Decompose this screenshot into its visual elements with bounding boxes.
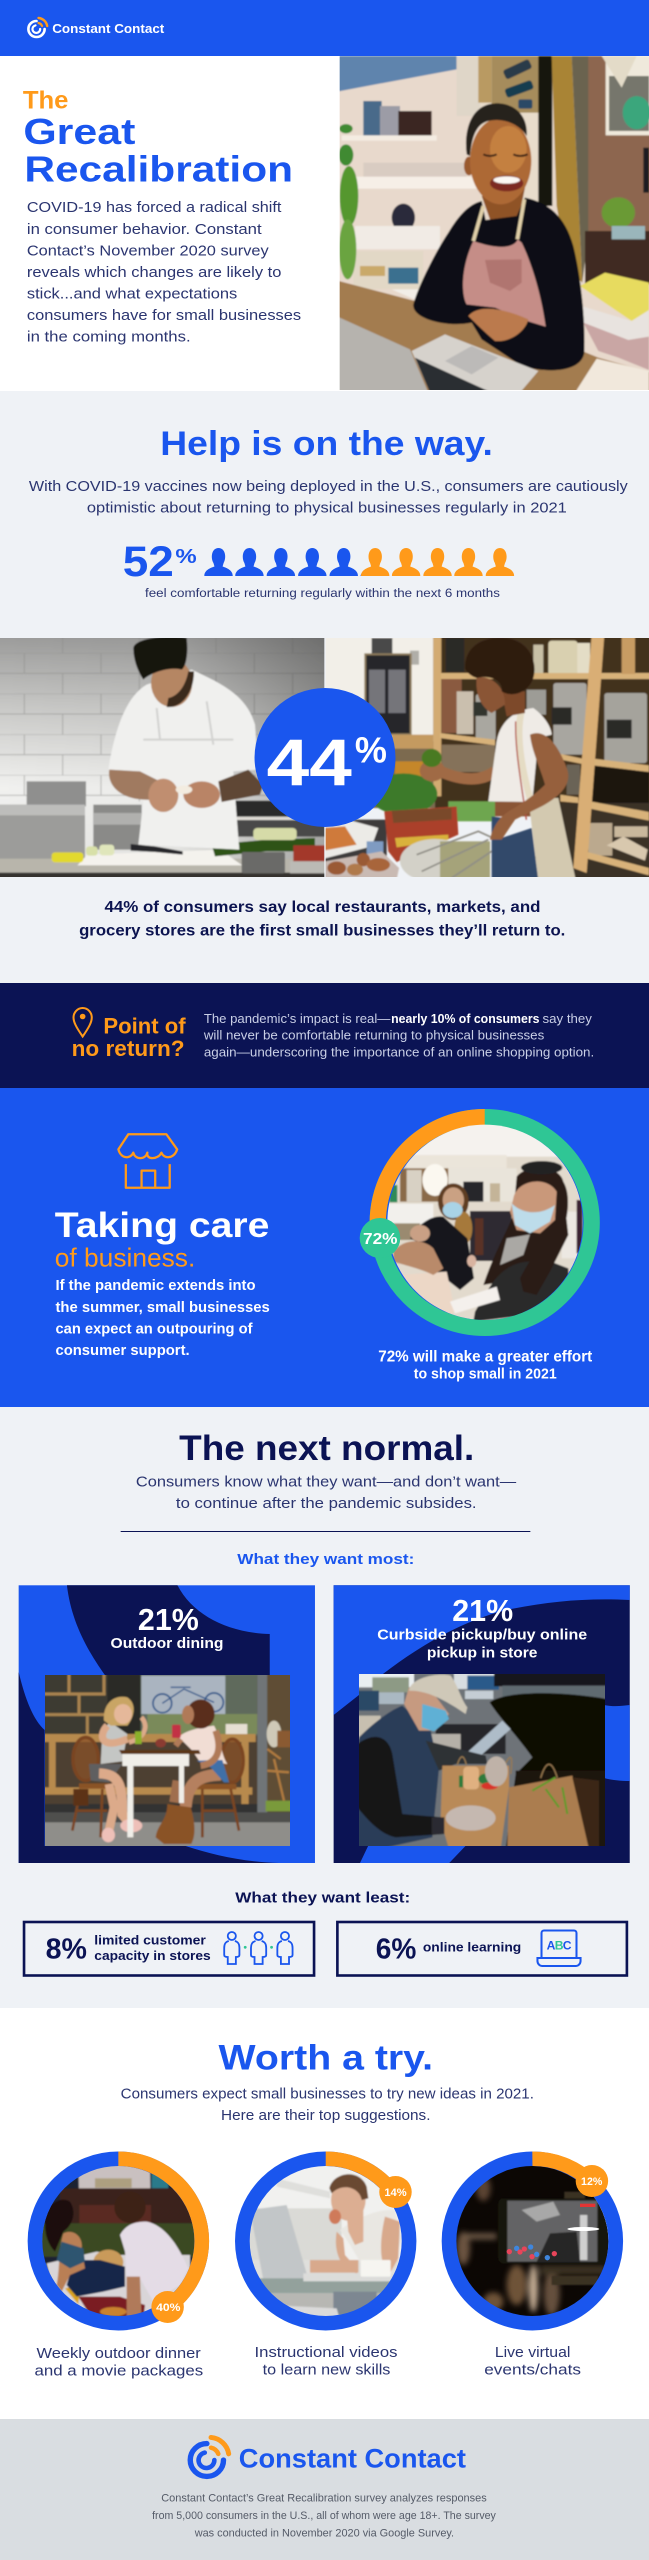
icon row: people [204,548,514,576]
panel: taking care of business [0,1088,649,1407]
panel: point of no return [0,983,649,1088]
chart caption [378,1349,592,1382]
stat: 52%: 52 [123,538,174,586]
intro paragraph: Contact’s November 2020 survey [27,243,269,259]
hero panel [0,56,649,393]
panel: worth a try [28,2044,624,2378]
stat: 52% [123,538,197,586]
badge: 40% [151,2291,184,2323]
stat: 21% [138,1602,199,1637]
intro paragraph: reveals which changes are likely to [27,264,281,281]
photo: couple at outdoor movie [40,2163,198,2320]
label: and a movie packages [34,2363,203,2379]
label: pickup in store [427,1646,537,1661]
icon: laptop with ABC: C [563,1939,572,1952]
badge: 14% [379,2176,412,2208]
photo: delivery worker with bags [357,1672,607,1849]
label [377,1628,587,1661]
icon: laptop with ABC: A [547,1939,556,1952]
icon: location pin [74,1008,92,1036]
box: online learning [337,1922,627,1976]
label: Weekly outdoor dinner [37,2345,201,2362]
label [94,1933,211,1963]
badge: 12% [576,2165,608,2197]
chart caption: 72% will make a greater effort [378,1349,592,1366]
photo: phone filming a live concert [453,2163,612,2320]
label [255,2344,398,2378]
panel: help is on the way [0,391,649,983]
intro paragraph [27,199,301,346]
box: limited capacity [24,1922,314,1976]
title: Great [23,111,135,152]
panel: the next normal [0,1407,649,2008]
subheading text: optimistic about returning to physical businesses regularly in 2021 [87,500,567,517]
badge: 14%: 14% [384,2187,407,2199]
stat: 8% [46,1934,87,1965]
logo: Constant Contact: Constant Contact [239,2443,466,2474]
title: The [23,87,68,114]
heading: Taking care [55,1206,269,1245]
photo: woman at laptop [248,2163,403,2320]
statement text [79,899,565,939]
heading: Help is on the way. [160,425,493,463]
chart caption: to shop small in 2021 [414,1365,557,1382]
card: outdoor dining [19,1585,315,1863]
subheading text: Here are their top suggestions. [221,2107,430,2124]
body text: consumer support. [55,1343,190,1359]
title: Recalibration [24,149,293,190]
badge: 40%: 40% [156,2302,181,2314]
label: Live virtual [495,2344,570,2361]
heading: The next normal. [179,1429,474,1468]
survey note [152,2493,496,2540]
donut: outdoor movie 40% [34,2159,203,2379]
badge: 72% [360,1218,400,1258]
statement text: 44% of consumers say local restaurants, markets, and [104,899,540,916]
logo: Constant Contact: Constant Contact [52,21,165,36]
stat: 6% [376,1934,416,1965]
subheading text [121,2085,534,2124]
subheading text: Consumers know what they want—and don’t want— [136,1474,517,1490]
icon: laptop with ABC [537,1930,581,1966]
donut: instructional videos 14% [242,2159,412,2378]
body text: can expect an outpouring of [55,1322,253,1337]
survey note: was conducted in November 2020 via Google Survey. [194,2528,454,2540]
heading [72,1014,186,1061]
photo: shopper at market [320,635,649,882]
badge: 12%: 12% [581,2176,602,2188]
badge: 72%: 72% [363,1231,398,1248]
intro paragraph: consumers have for small businesses [27,307,301,324]
intro paragraph: in consumer behavior. Constant [27,221,263,238]
label: online learning [423,1939,521,1954]
label: to learn new skills [263,2362,390,2378]
label [484,2344,581,2378]
body text: nearly 10% of consumers [391,1012,539,1026]
label: capacity in stores [94,1948,211,1963]
stat: 21% [452,1593,513,1628]
subheading text [29,478,628,517]
subheading text: With COVID-19 vaccines now being deployed in the U.S., consumers are cautiously [29,478,628,495]
intro paragraph: in the coming months. [27,329,191,346]
survey note: Constant Contact’s Great Recalibration survey analyzes responses [161,2493,487,2505]
photo: women at cafe table [42,1672,292,1849]
footer [0,2419,649,2560]
logo: Constant Contact [28,18,165,37]
photo: masked shoppers [383,1122,587,1325]
label [34,2345,203,2379]
subheading text: Consumers expect small businesses to try new ideas in 2021. [121,2085,534,2102]
body text: the summer, small businesses [55,1300,270,1316]
title [23,87,293,190]
body text: again—underscoring the importance of an online shopping option. [204,1045,594,1059]
icon: laptop with ABC: B [555,1939,564,1952]
body text: will never be comfortable returning to physical businesses [203,1029,544,1043]
survey note: from 5,000 consumers in the U.S., all of whom were age 18+. The survey [152,2510,496,2522]
heading: no return? [72,1036,185,1061]
heading: Worth a try. [219,2039,433,2077]
icon: storefront [118,1134,177,1188]
callout: 44% circle: 44 [267,726,352,800]
body text: say they [543,1012,593,1026]
label: Outdoor dining [111,1636,223,1652]
body text [55,1278,270,1359]
photo: smiling shop owner at laptop [335,56,649,393]
statement text: grocery stores are the first small businesses they’ll return to. [79,923,565,939]
logo: Constant Contact [190,2437,466,2476]
subheading text: to continue after the pandemic subsides. [176,1495,477,1512]
heading: Point of [103,1014,186,1038]
heading: of business. [55,1243,195,1272]
label: Curbside pickup/buy online [377,1628,587,1644]
icon: distanced people [224,1932,293,1964]
label: what they want most: What they want most: [237,1551,414,1568]
body text: The pandemic’s impact is real— [204,1012,391,1026]
stat: 52%: % [175,546,197,568]
label: what they want least: What they want least: [235,1890,410,1906]
intro paragraph: stick...and what expectations [27,286,237,302]
donut: live virtual events 12% [449,2159,616,2378]
header bar [0,0,649,56]
label: events/chats [484,2362,581,2378]
label: limited customer [94,1933,206,1947]
heading [55,1206,269,1272]
caption: feel comfortable returning regularly within the next 6 months [145,586,500,600]
callout: 44% circle: % [355,730,387,770]
donut chart: 72% [360,1117,592,1328]
body text: If the pandemic extends into [55,1278,256,1294]
photo: chef in kitchen [0,635,327,881]
subheading text [136,1474,517,1512]
callout: 44% circle [255,688,395,827]
body text [203,1012,594,1059]
card: curbside pickup [334,1585,630,1863]
label: Instructional videos [255,2344,398,2361]
intro paragraph: COVID-19 has forced a radical shift [27,199,282,216]
